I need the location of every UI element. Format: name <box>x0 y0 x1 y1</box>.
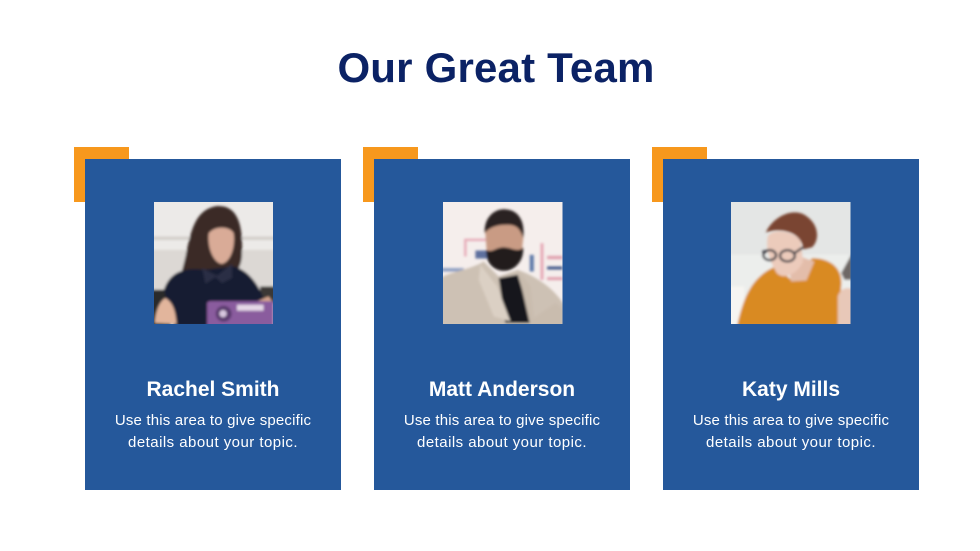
accent square: card 2 <box>363 147 418 202</box>
description <box>404 412 600 451</box>
photo: Katy Mills <box>731 202 850 324</box>
description: details about your topic. <box>417 434 587 451</box>
panel: Matt Anderson <box>374 159 630 490</box>
description: details about your topic. <box>128 434 298 451</box>
description: Use this area to give specific <box>693 412 889 429</box>
accent square: card 1 <box>74 147 129 202</box>
name: Katy Mills <box>742 378 840 401</box>
description: Use this area to give specific <box>115 412 311 429</box>
photo: Matt Anderson <box>443 202 562 324</box>
name: Rachel Smith <box>146 378 280 401</box>
panel: Katy Mills <box>663 159 919 490</box>
name: Matt Anderson <box>429 378 575 401</box>
description: details about your topic. <box>706 434 876 451</box>
panel: Rachel Smith <box>85 159 341 490</box>
description: Use this area to give specific <box>404 412 600 429</box>
title: Our Great Team <box>337 44 655 91</box>
description <box>693 412 889 451</box>
description <box>115 412 311 451</box>
photo: Rachel Smith <box>154 202 273 324</box>
accent square: card 3 <box>652 147 707 202</box>
